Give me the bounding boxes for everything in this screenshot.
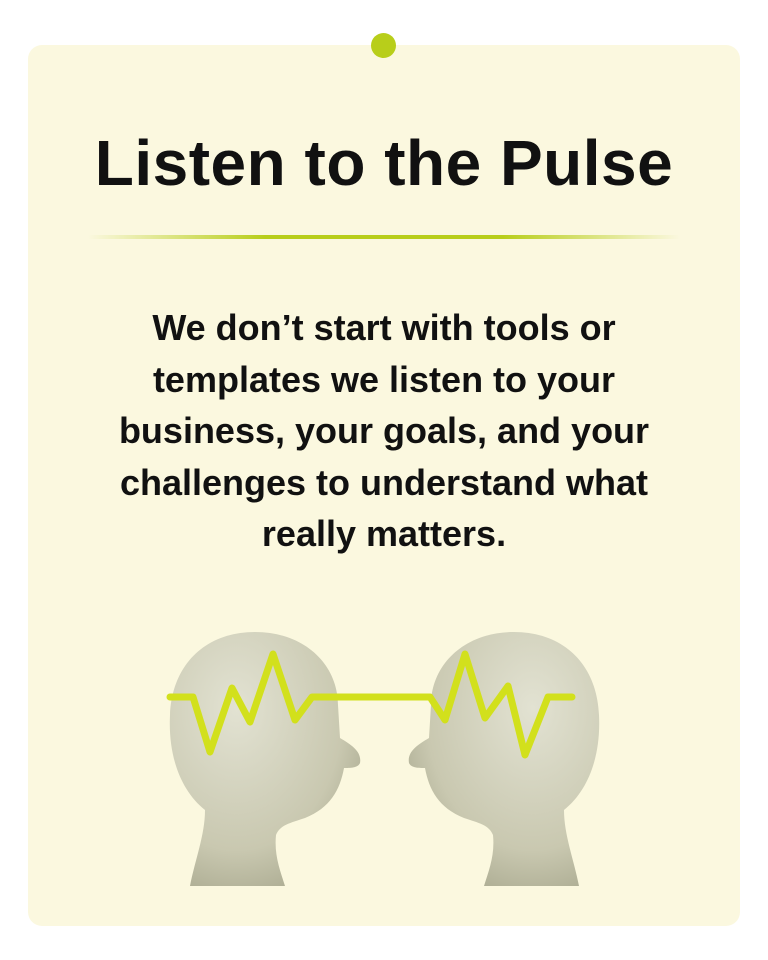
title: Listen to the Pulse: [95, 127, 673, 199]
text block: description: We don’t start with tools or templates we listen to your business, your goals, and your challenges to understand what really matters.: [119, 307, 649, 554]
icon: left head: [170, 632, 360, 886]
icon: pin dot: [371, 33, 396, 58]
icon: pulse wave: [170, 654, 572, 755]
divider line: [88, 235, 680, 239]
icon: right head: [409, 632, 599, 886]
